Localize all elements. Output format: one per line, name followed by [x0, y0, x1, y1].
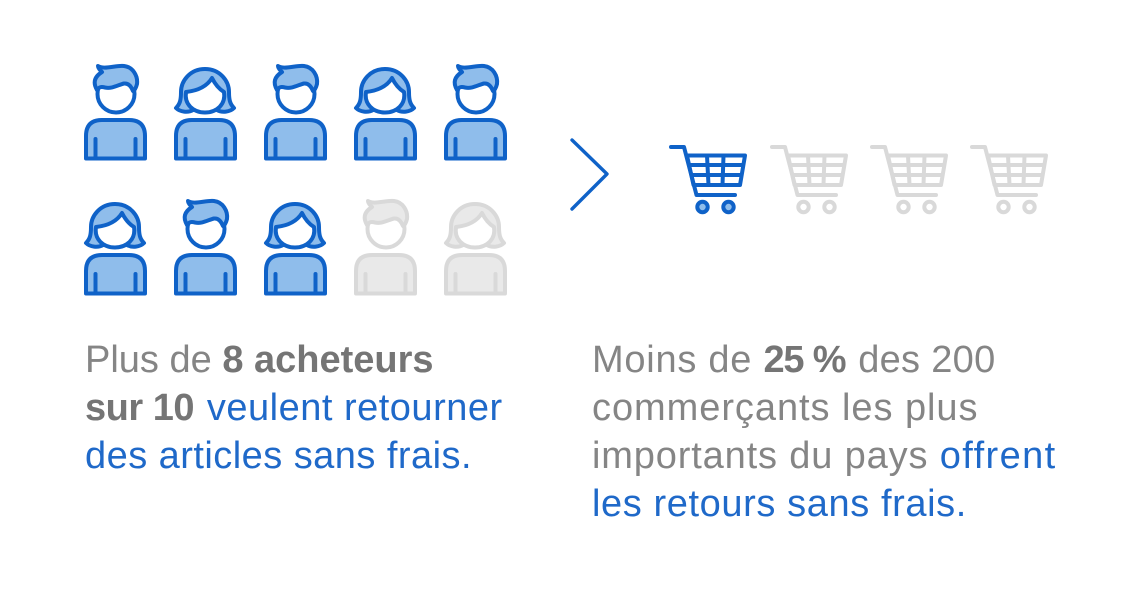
people row 1 — [86, 66, 505, 158]
text block: left caption: des articles sans frais. — [85, 435, 472, 477]
text block: right caption: les retours sans frais. — [592, 483, 967, 525]
icon: grey cart 3 — [972, 147, 1046, 212]
text block: right caption — [592, 339, 1057, 525]
icon: grey woman — [446, 204, 505, 294]
text block: right caption: Moins de 25 % des 200 — [592, 339, 996, 381]
icon: blue cart — [671, 147, 745, 212]
grey people — [356, 201, 505, 294]
text block: right caption: importants du pays offrent — [592, 435, 1057, 477]
icon: man 2 — [266, 66, 325, 158]
text block: left caption — [85, 339, 503, 477]
icon: woman 4 — [266, 204, 325, 294]
arrow — [572, 140, 607, 209]
icon: man 1 — [86, 66, 145, 158]
icon: man 3 — [446, 66, 505, 158]
people row 2 — [86, 201, 325, 294]
text block: left caption: Plus de 8 acheteurs — [85, 339, 434, 381]
icon: woman 2 — [356, 69, 415, 158]
icon: grey cart 1 — [772, 147, 846, 212]
icon: woman 1 — [176, 69, 235, 158]
icon: grey cart 2 — [872, 147, 946, 212]
icon: woman 3 — [86, 204, 145, 294]
icon: man 4 — [176, 201, 235, 294]
icon: grey man — [356, 201, 415, 294]
text block: right caption: commerçants les plus — [592, 387, 978, 429]
text block: left caption: sur 10 veulent retourner — [85, 387, 503, 429]
